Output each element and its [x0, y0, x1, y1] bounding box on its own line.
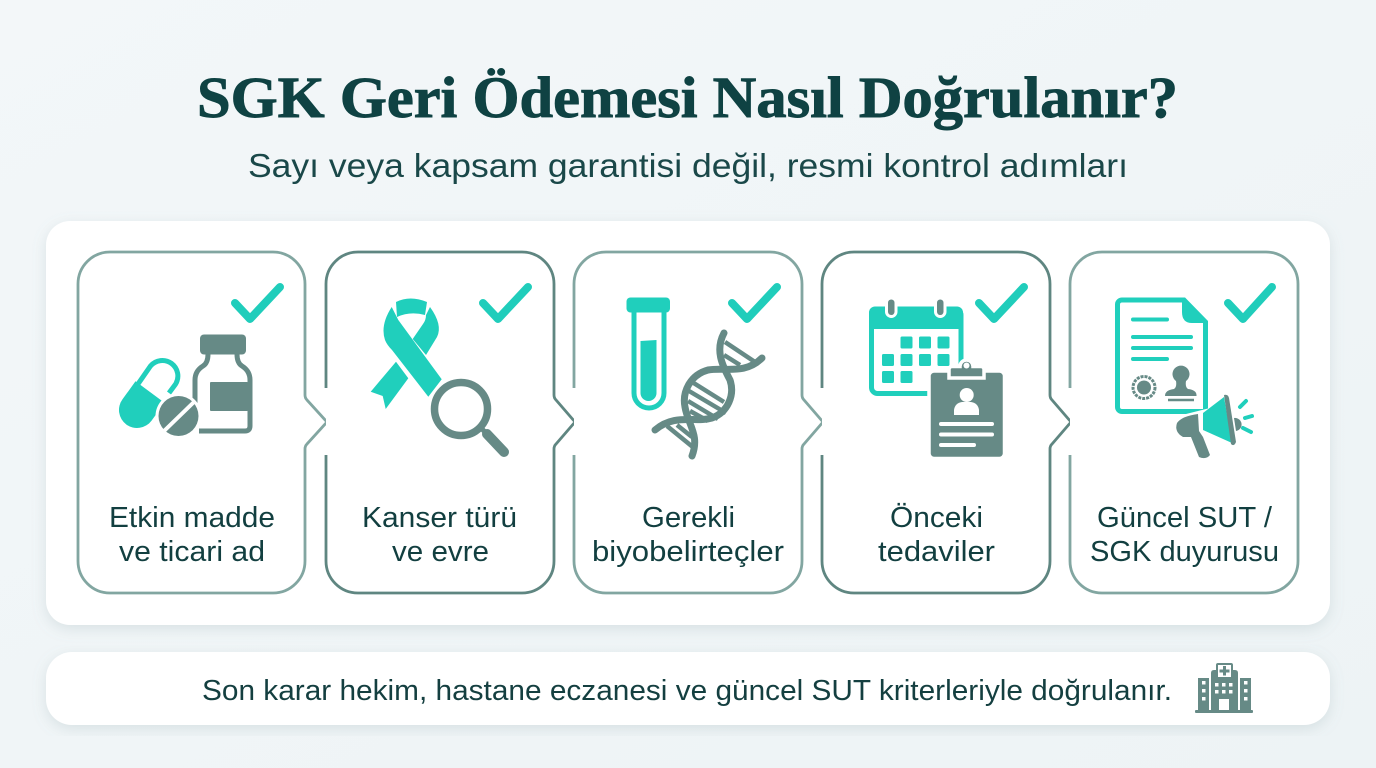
- icon: calendar and clipboard: [869, 298, 1004, 458]
- label 4: tedaviler: [878, 536, 995, 568]
- step 4: previous treatments: [822, 252, 1071, 593]
- step 2: cancer type and stage: [326, 252, 575, 593]
- label 5: SGK duyurusu: [1090, 536, 1279, 568]
- icon: hospital: [1195, 664, 1253, 713]
- label 4: [878, 502, 995, 568]
- label 3: biyobelirteçler: [592, 536, 784, 568]
- panel: verification steps: [46, 221, 1330, 625]
- check mark 4: [979, 287, 1024, 319]
- check mark 2: [483, 287, 528, 319]
- label 1: ve ticari ad: [119, 536, 265, 568]
- label 5: Güncel SUT /: [1097, 502, 1273, 534]
- label 3: [592, 502, 784, 568]
- check mark 3: [732, 287, 777, 319]
- icon: pills and bottle: [119, 334, 250, 439]
- title: SGK Geri Ödemesi Nasıl Doğrulanır?: [197, 65, 1178, 130]
- panel: final decision note: [46, 652, 1330, 725]
- label 3: Gerekli: [642, 502, 735, 534]
- icon: ribbon and magnifier: [371, 298, 504, 452]
- label 2: [362, 502, 517, 568]
- card outline 5: [1070, 252, 1298, 593]
- check mark 1: [235, 287, 280, 319]
- subtitle: Sayı veya kapsam garantisi değil, resmi kontrol adımları: [248, 147, 1128, 184]
- card outline 1: [78, 252, 327, 593]
- card outline 3: [574, 252, 823, 593]
- label 2: ve evre: [392, 536, 489, 568]
- check mark 5: [1228, 287, 1272, 319]
- label 2: Kanser türü: [362, 502, 517, 534]
- step 5: current SUT and SGK announcement: [1070, 252, 1298, 593]
- label 1: Etkin madde: [109, 502, 275, 534]
- label 5: [1090, 502, 1279, 568]
- label 4: Önceki: [890, 502, 983, 534]
- icon: test tube and DNA: [626, 298, 762, 456]
- note text: Son karar hekim, hastane eczanesi ve güncel SUT kriterleriyle doğrulanır.: [202, 675, 1172, 707]
- label 1: [109, 502, 275, 568]
- step 1: active ingredient and brand name: [78, 252, 327, 593]
- card outline 2: [326, 252, 575, 593]
- card outline 4: [822, 252, 1071, 593]
- step 3: required biomarkers: [574, 252, 823, 593]
- icon: document, stamp and megaphone: [1118, 298, 1252, 458]
